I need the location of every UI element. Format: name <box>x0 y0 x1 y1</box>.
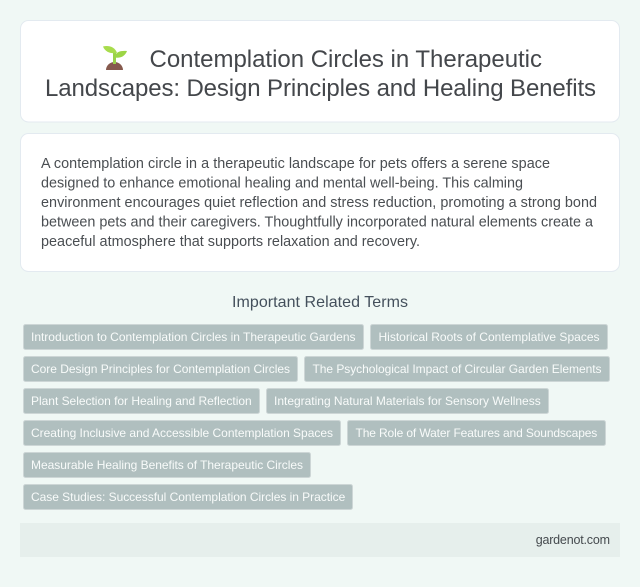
heading: important related terms: Important Related Terms <box>232 294 408 311</box>
tag: water features: The Role of Water Features and Soundscapes <box>356 426 597 440</box>
tag: case studies <box>24 484 352 510</box>
tag: plant selection <box>24 388 260 414</box>
tag: core design <box>24 356 298 382</box>
tag: introduction <box>24 324 364 350</box>
tag: plant selection: Plant Selection for Healing and Reflection <box>31 394 252 408</box>
icon: seedling <box>103 46 127 70</box>
tag: historical roots: Historical Roots of Contemplative Spaces <box>378 330 600 344</box>
text block: description: A contemplation circle in a therapeutic landscape for pets offers a serene space <box>41 156 550 172</box>
tag: natural materials <box>266 388 548 414</box>
tag: water features <box>348 420 606 446</box>
title: Contemplation Circles in Therapeutic <box>150 46 542 73</box>
text block: description: designed to enhance emotional healing and mental well-being. This calming <box>41 176 523 192</box>
title <box>45 46 596 102</box>
title: Landscapes: Design Principles and Healing Benefits <box>45 75 596 102</box>
tag: healing benefits <box>24 452 310 478</box>
tag: inclusive spaces <box>24 420 340 446</box>
panel: header card <box>20 20 620 122</box>
tag: psychological impact: The Psychological Impact of Circular Garden Elements <box>312 362 602 376</box>
tag: core design: Core Design Principles for Contemplation Circles <box>31 362 290 376</box>
tag: case studies: Case Studies: Successful Contemplation Circles in Practice <box>31 490 346 504</box>
tag: introduction: Introduction to Contemplation Circles in Therapeutic Gardens <box>31 330 356 344</box>
text block: description: environment encourages quiet reflection and stress reduction, promoting a strong bond <box>41 195 597 211</box>
tag: natural materials: Integrating Natural Materials for Sensory Wellness <box>274 394 541 408</box>
tag: healing benefits: Measurable Healing Benefits of Therapeutic Circles <box>31 458 303 472</box>
tag: psychological impact <box>304 356 610 382</box>
text block: description <box>41 156 597 250</box>
panel: description card <box>20 134 620 272</box>
tag: historical roots <box>370 324 608 350</box>
tag: inclusive spaces: Creating Inclusive and Accessible Contemplation Spaces <box>31 426 333 440</box>
text block: description: peaceful atmosphere that supports relaxation and recovery. <box>41 234 420 250</box>
footer bar <box>20 523 620 557</box>
footer text: gardenot.com <box>536 533 610 547</box>
tag list <box>24 324 610 510</box>
text block: description: between pets and their caregivers. Thoughtfully incorporated natural elements create a <box>41 214 593 230</box>
